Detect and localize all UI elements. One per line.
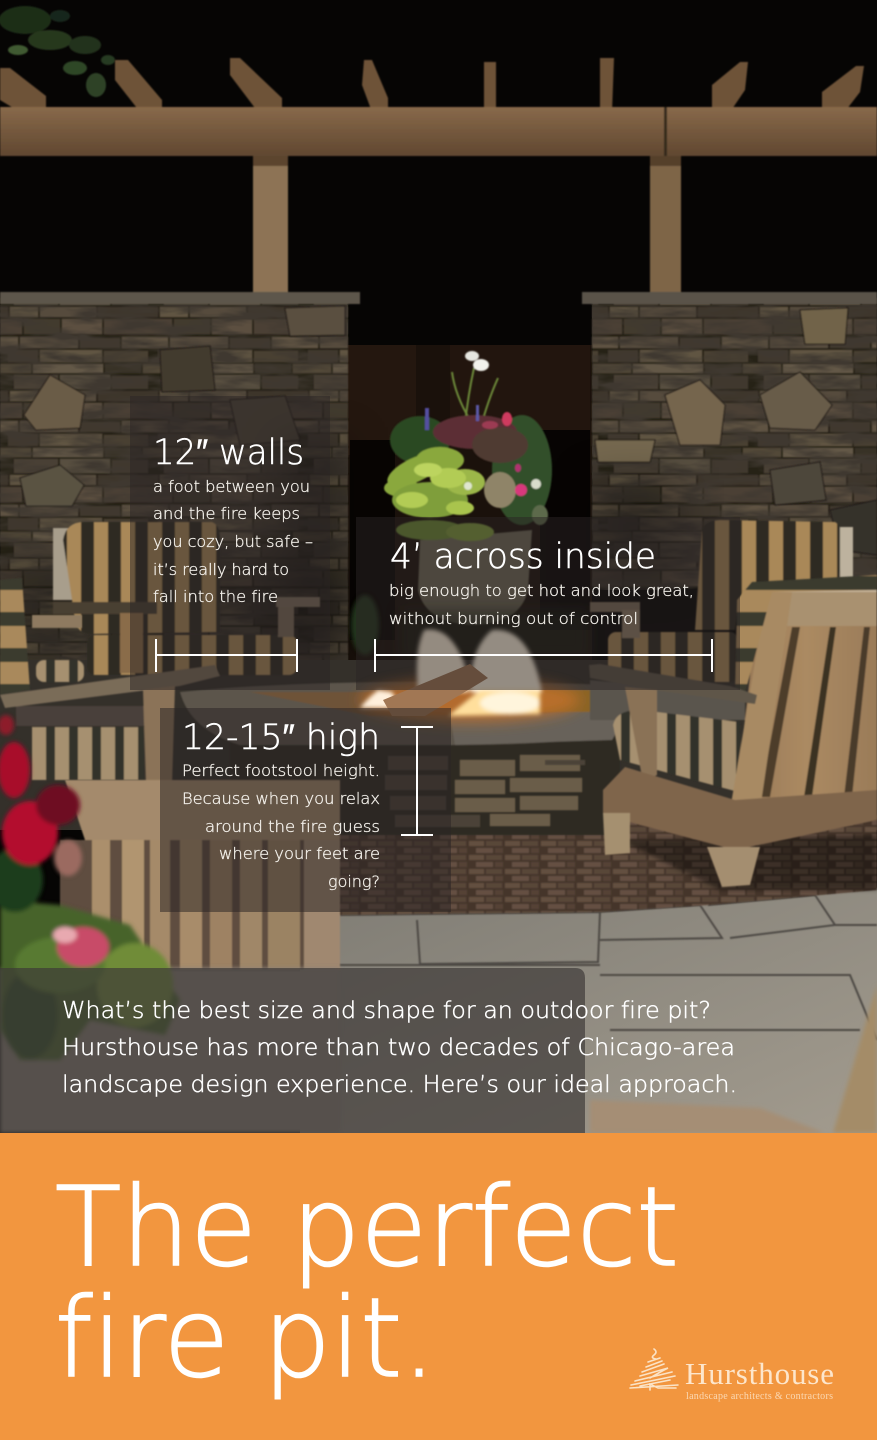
front right chair xyxy=(589,575,877,887)
back right chair xyxy=(590,520,853,682)
urn xyxy=(418,530,532,625)
front post xyxy=(625,687,657,782)
title: fire pit. xyxy=(55,1274,436,1402)
text: across description xyxy=(389,581,694,628)
purple spikes xyxy=(425,408,429,430)
ground flagstones xyxy=(300,888,877,1133)
text: walls description: fall into the fire xyxy=(153,587,278,606)
heading: high: 12-15″ high xyxy=(182,718,380,758)
pit stone wall xyxy=(230,735,620,835)
shrub below planter xyxy=(351,595,379,655)
wall caps xyxy=(0,292,360,304)
title xyxy=(55,1163,679,1402)
measure: wall width xyxy=(156,639,297,672)
side slats xyxy=(735,585,877,805)
logo: Hursthouse xyxy=(630,1349,834,1402)
icon: sketched tree xyxy=(630,1349,678,1390)
text: across description: without burning out of control xyxy=(389,609,638,628)
base rail xyxy=(603,767,877,850)
ground behind chairs xyxy=(0,660,877,830)
stone mottling right xyxy=(592,305,877,590)
fire xyxy=(360,629,580,722)
night background xyxy=(0,0,877,1133)
pit top rim xyxy=(180,682,650,745)
stone mottling left xyxy=(0,305,348,705)
ground under foreground xyxy=(0,968,340,1133)
logo wordmark: Hursthouse xyxy=(685,1356,834,1391)
bright leaves xyxy=(383,446,494,541)
side stripes xyxy=(735,575,877,693)
text: intro paragraph: What’s the best size and shape for an outdoor fire pit? xyxy=(62,996,711,1024)
rafters xyxy=(0,58,864,118)
text: height description: where your feet are xyxy=(219,844,380,863)
text: across description: big enough to get hot and look great, xyxy=(389,581,694,600)
panel: intro xyxy=(0,968,737,1133)
pink blooms xyxy=(515,484,527,496)
under-arm stone xyxy=(590,680,745,720)
text: walls description: and the fire keeps xyxy=(153,504,300,523)
text: height description: Because when you relax xyxy=(182,789,380,808)
arm xyxy=(589,664,757,704)
text: height description: Perfect footstool height. xyxy=(182,761,380,780)
panel: 12 inch walls xyxy=(130,396,330,690)
back left chair xyxy=(53,522,320,675)
fire pit xyxy=(180,682,650,835)
logo tagline: landscape architects & contractors xyxy=(686,1391,833,1402)
main beam xyxy=(0,107,877,156)
legs xyxy=(603,813,630,855)
text: intro paragraph: Hursthouse has more than two decades of Chicago-area xyxy=(62,1033,735,1061)
front edge xyxy=(730,592,792,810)
stems xyxy=(452,368,498,430)
text: walls description: a foot between you xyxy=(153,477,310,496)
text: height description: around the fire guess xyxy=(205,817,380,836)
orange title band xyxy=(0,1133,877,1440)
text: walls description xyxy=(153,477,313,606)
central dark fence xyxy=(346,345,592,695)
text: height description xyxy=(182,761,380,891)
front left chair xyxy=(0,578,220,786)
panel: 4 foot across xyxy=(356,517,740,690)
pergola xyxy=(0,58,877,296)
text: walls description: you cozy, but safe – xyxy=(153,532,313,551)
brick paving xyxy=(300,815,877,915)
wall shading xyxy=(0,440,680,660)
measure: wall height xyxy=(401,727,433,835)
text: intro paragraph: landscape design experience. Here’s our ideal approach. xyxy=(62,1070,737,1098)
white blooms xyxy=(465,351,479,361)
foreground flowers xyxy=(0,715,180,1060)
foreground wooden chair back xyxy=(60,780,340,970)
panel: 12-15 inch high xyxy=(160,708,451,912)
foliage top left xyxy=(0,6,115,97)
text: intro paragraph xyxy=(62,996,737,1098)
heading: across: 4’ across inside xyxy=(390,537,656,577)
posts xyxy=(253,156,288,296)
top rail xyxy=(768,590,877,626)
text: walls description: it’s really hard to xyxy=(153,560,289,579)
stone walls xyxy=(0,292,877,708)
heading: walls: 12″ walls xyxy=(153,433,304,473)
planter with flowers xyxy=(383,351,552,625)
seat cushion xyxy=(613,710,742,793)
measure: pit diameter xyxy=(375,639,712,672)
boulders xyxy=(20,306,877,555)
dark leaves xyxy=(390,416,450,464)
foreground post xyxy=(833,985,877,1133)
text: height description: going? xyxy=(328,872,380,891)
title: The perfect xyxy=(55,1163,679,1291)
